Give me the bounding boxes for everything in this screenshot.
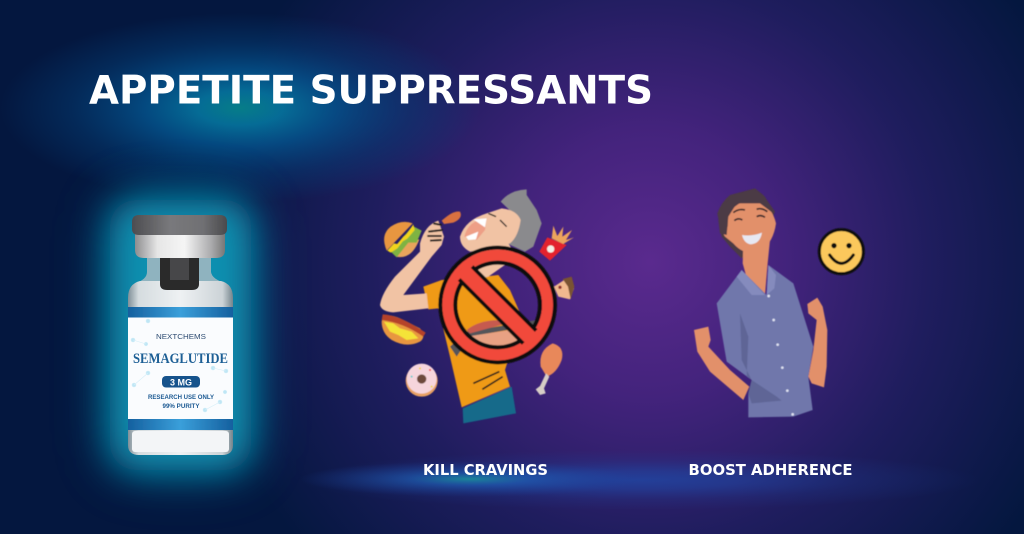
- dosage badge: 3 MG: [170, 378, 192, 388]
- hotdog: [382, 314, 426, 345]
- label: [128, 317, 233, 419]
- cap: [132, 215, 227, 235]
- mouth: [464, 218, 487, 240]
- smiley: [819, 230, 863, 274]
- label text: 99% PURITY: [162, 404, 200, 410]
- shirt: [717, 265, 813, 417]
- hair: [501, 189, 542, 252]
- title: APPETITE SUPPRESSANTS: [89, 68, 653, 114]
- neck: [743, 240, 770, 295]
- caption glow: [300, 450, 980, 510]
- product name: SEMAGLUTIDE: [133, 351, 228, 367]
- molecule pattern: [131, 319, 228, 412]
- burger: [384, 222, 422, 257]
- label text: [148, 394, 215, 410]
- legs: [463, 387, 516, 423]
- fries: [539, 226, 574, 261]
- shirt shadow: [740, 313, 782, 403]
- small bun: [554, 277, 574, 299]
- label text: RESEARCH USE ONLY: [148, 394, 215, 401]
- torso shirt: [423, 275, 522, 407]
- tray: [450, 320, 537, 357]
- dosage badge: [162, 376, 200, 388]
- hand fingers: [427, 223, 443, 241]
- wing: [442, 211, 461, 224]
- face: [723, 200, 776, 254]
- shirt fold lines: [473, 372, 503, 389]
- neck: [472, 243, 517, 280]
- caption: boost adherence: BOOST ADHERENCE: [688, 461, 852, 479]
- illustration: cravings: [380, 189, 574, 423]
- smile: [742, 233, 762, 244]
- head: [460, 208, 521, 252]
- arm: [380, 221, 444, 312]
- donut: [406, 364, 438, 397]
- eyes and brows: [733, 209, 767, 221]
- collar: [737, 265, 776, 295]
- closed eyes: [488, 213, 507, 227]
- label bands: [128, 307, 233, 430]
- illustration: happy person: [694, 188, 863, 417]
- vial: semaglutide: [128, 215, 233, 455]
- caption: kill cravings: KILL CRAVINGS: [423, 461, 548, 479]
- arm left: [694, 327, 749, 400]
- vial neck: [128, 256, 233, 300]
- vial glow: [110, 200, 251, 470]
- brand logo: NEXTCHEMS: [156, 334, 206, 341]
- no symbol: [440, 248, 555, 362]
- rubber stopper: [160, 257, 199, 290]
- title glow: [0, 13, 480, 203]
- hair back: [717, 188, 775, 258]
- chicken leg: [536, 343, 562, 395]
- arm right: [807, 298, 827, 387]
- buttons: [767, 295, 794, 416]
- vial body: [128, 281, 233, 455]
- silver crimp: [135, 234, 225, 258]
- powder: [132, 431, 229, 452]
- hair front: [718, 189, 773, 235]
